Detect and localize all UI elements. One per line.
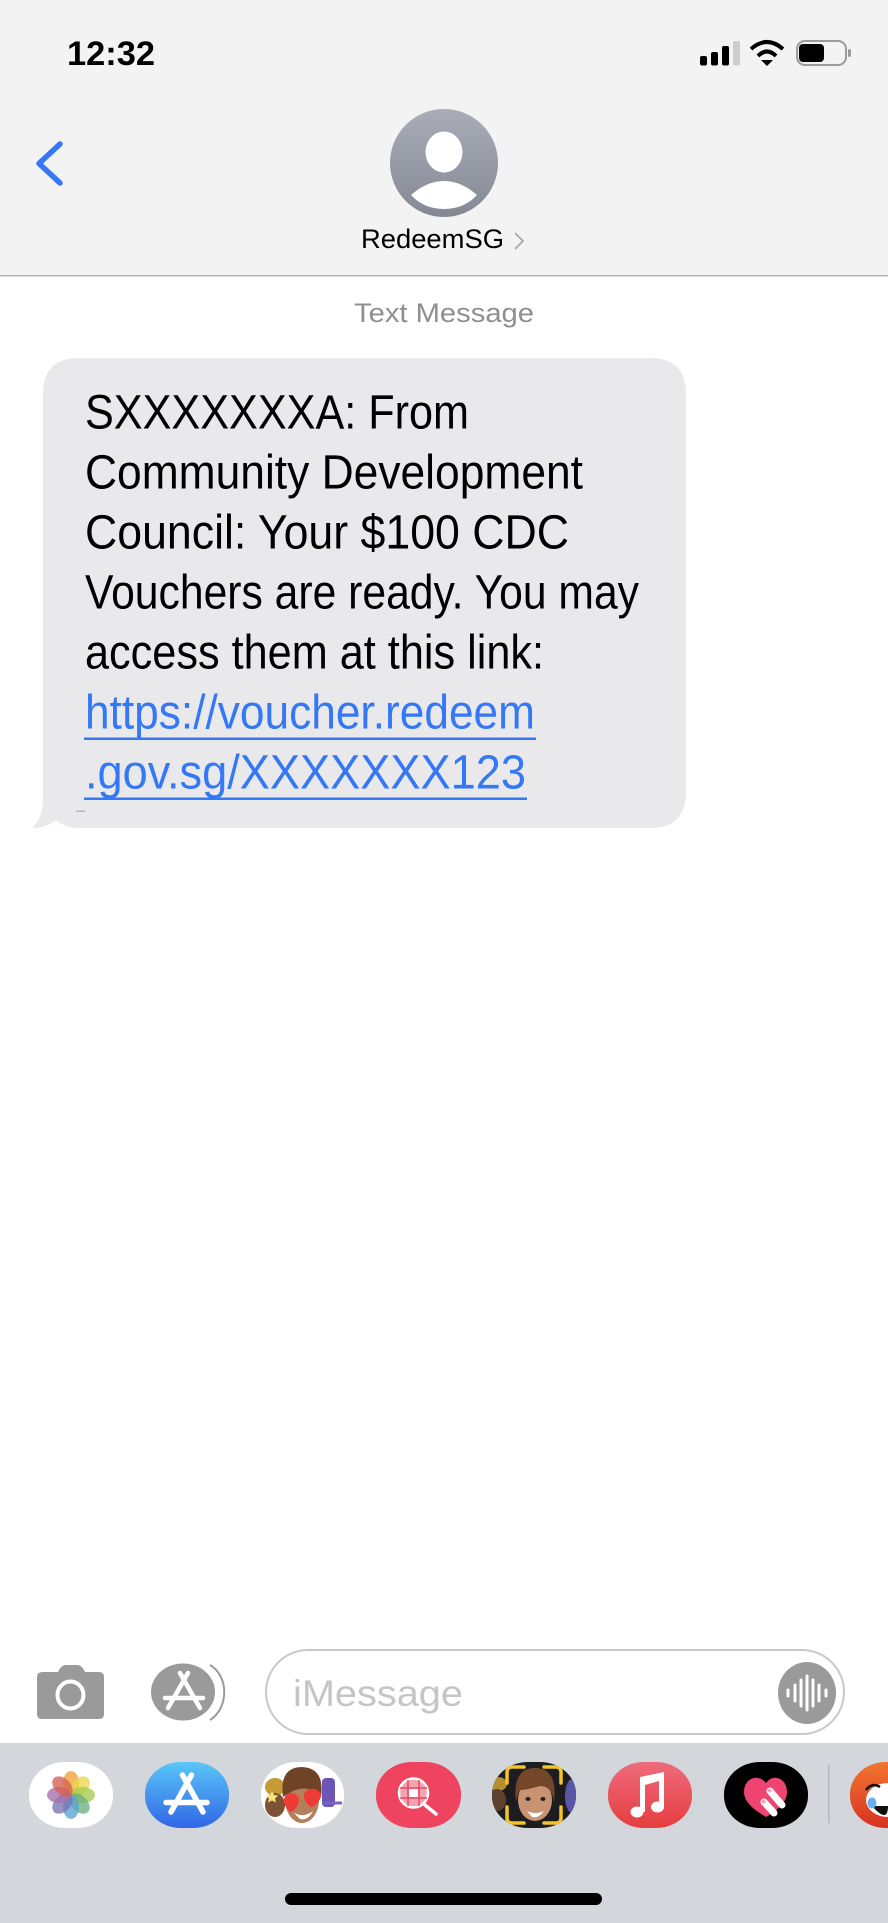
clock: 12:32 xyxy=(67,35,155,73)
icon: memoji stickers xyxy=(261,1762,344,1828)
message input field xyxy=(266,1650,844,1734)
icon: wifi xyxy=(751,42,783,66)
drawer divider xyxy=(828,1765,830,1823)
message body text: access them at this link: xyxy=(85,626,544,680)
home indicator xyxy=(285,1893,602,1905)
icon: back chevron xyxy=(39,144,60,183)
message body text: SXXXXXXXA: From xyxy=(85,386,469,440)
message type label: Text Message xyxy=(354,298,534,328)
icon: contact chevron xyxy=(515,233,523,249)
contact name: RedeemSG xyxy=(361,224,504,254)
message body text xyxy=(85,386,639,680)
icon: memoji camera xyxy=(488,1762,579,1828)
message body text: Community Development xyxy=(85,446,583,500)
message bubble xyxy=(32,358,686,828)
icon: signal bars xyxy=(700,41,740,66)
icon: music xyxy=(608,1762,692,1828)
message link xyxy=(84,686,536,800)
icon: partial reddit sticker app xyxy=(850,1762,888,1828)
icon: image search xyxy=(376,1762,461,1828)
icon: app drawer xyxy=(151,1664,224,1720)
app drawer panel xyxy=(0,1743,888,1923)
icon: fundraising heart xyxy=(724,1762,808,1828)
icon: app store xyxy=(145,1762,229,1828)
icon: contact avatar xyxy=(390,109,498,217)
icon: photos xyxy=(29,1762,113,1828)
icon: voice message xyxy=(778,1662,836,1724)
message body text: Vouchers are ready. You may xyxy=(85,566,639,620)
input placeholder: iMessage xyxy=(293,1673,463,1714)
message link: https://voucher.redeem xyxy=(85,686,535,740)
message body text: Council: Your $100 CDC xyxy=(85,506,569,560)
header panel xyxy=(0,0,888,276)
message link: .gov.sg/XXXXXXX123 xyxy=(85,746,526,800)
icon: camera xyxy=(37,1665,104,1719)
icon: battery xyxy=(797,41,851,65)
